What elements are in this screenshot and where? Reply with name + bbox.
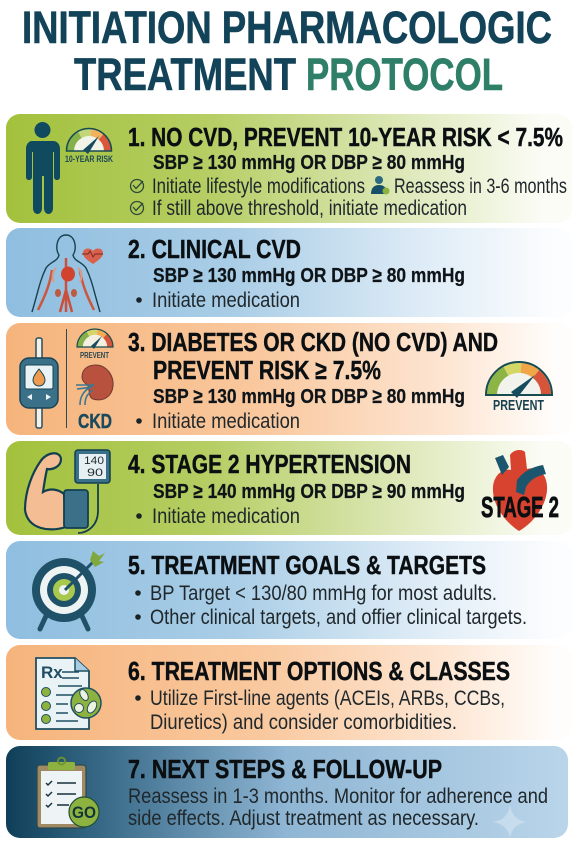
- icon: prescription with pills: Rx: [41, 663, 63, 682]
- icon: clipboard with go badge: [37, 758, 99, 828]
- criteria 4: SBP ≥ 140 mmHg OR DBP ≥ 90 mmHg: [153, 480, 465, 503]
- follow-up text: side effects. Adjust treatment as necessary.: [128, 807, 479, 830]
- title: PROTOCOL: [306, 49, 503, 100]
- heading 2: 2. CLINICAL CVD: [128, 234, 301, 264]
- criteria 1: SBP ≥ 130 mmHg OR DBP ≥ 80 mmHg: [153, 151, 465, 174]
- bullet 2: [136, 297, 142, 303]
- panel: 4 stage 2 hypertension: [6, 441, 572, 535]
- panel: 2 clinical CVD: [6, 228, 572, 317]
- title: [22, 2, 552, 100]
- icon: doctor and clock: [371, 176, 390, 194]
- bullet 4: [136, 513, 142, 519]
- icon: person: [26, 122, 60, 214]
- heading 5: 5. TREATMENT GOALS & TARGETS: [128, 550, 486, 580]
- icon: body with circulatory system: [32, 235, 100, 312]
- icon: blood pressure monitor: [75, 450, 110, 483]
- panel: 7 next steps: [6, 746, 568, 838]
- heading 3: PREVENT RISK ≥ 7.5%: [153, 355, 381, 385]
- icon: prescription with pills: [36, 658, 101, 729]
- icon: 10-year risk gauge: [66, 128, 112, 154]
- bullets 5: [135, 590, 141, 620]
- label: 10-year risk: 10-YEAR RISK: [65, 154, 113, 164]
- action 2: Initiate medication: [152, 289, 300, 312]
- step: lifestyle: Initiate lifestyle modifications: [152, 175, 365, 198]
- icon: heart rate: [82, 249, 103, 264]
- first-line agents text: [150, 687, 505, 734]
- panel: 1 no CVD: [6, 114, 572, 223]
- title: TREATMENT: [74, 49, 296, 100]
- criteria 3: SBP ≥ 130 mmHg OR DBP ≥ 80 mmHg: [153, 385, 465, 408]
- panel: 5 treatment goals: [6, 541, 572, 639]
- icon: heart with stage 2: [481, 450, 559, 531]
- icon: blood pressure monitor: 140: [84, 455, 104, 467]
- step: medication: If still above threshold, initiate medication: [152, 197, 467, 220]
- label: large prevent: PREVENT: [493, 397, 544, 414]
- icon: blood pressure monitor: 90: [87, 467, 103, 479]
- label: small prevent: PREVENT: [80, 351, 109, 360]
- bullet 3: [136, 418, 142, 424]
- icon: kidney: [76, 365, 113, 405]
- bullet 6: [135, 695, 141, 701]
- icon: flexed arm with cuff: [25, 453, 98, 533]
- heading 7: 7. NEXT STEPS & FOLLOW-UP: [128, 754, 442, 784]
- label: CKD: CKD: [78, 411, 112, 433]
- action 4: Initiate medication: [152, 505, 300, 528]
- icon: glucose meter: [20, 338, 58, 428]
- divider: [66, 329, 68, 428]
- icon: target with arrow: [32, 551, 105, 629]
- icon: clipboard with go badge: GO: [72, 803, 96, 822]
- target text: BP Target < 130/80 mmHg for most adults.: [150, 582, 497, 605]
- follow-up text: [128, 785, 548, 830]
- panel: 6 treatment options: [6, 645, 572, 740]
- panel: 3 diabetes or CKD: [6, 323, 572, 435]
- action 3: Initiate medication: [152, 410, 300, 433]
- icon: large prevent gauge: [486, 362, 552, 398]
- first-line agents text: Utilize First-line agents (ACEIs, ARBs, CCBs,: [150, 687, 505, 710]
- criteria 2: SBP ≥ 130 mmHg OR DBP ≥ 80 mmHg: [153, 264, 465, 287]
- icon: small prevent gauge: [77, 329, 113, 349]
- heading 3: 3. DIABETES OR CKD (NO CVD) AND: [128, 327, 498, 357]
- first-line agents text: Diuretics) and consider comorbidities.: [150, 711, 457, 734]
- sparkle: [493, 805, 527, 838]
- other targets text: Other clinical targets, and offier clinical targets.: [150, 606, 527, 629]
- heading 4: 4. STAGE 2 HYPERTENSION: [128, 449, 411, 479]
- heading 3: [128, 327, 498, 385]
- check icons: [130, 180, 144, 214]
